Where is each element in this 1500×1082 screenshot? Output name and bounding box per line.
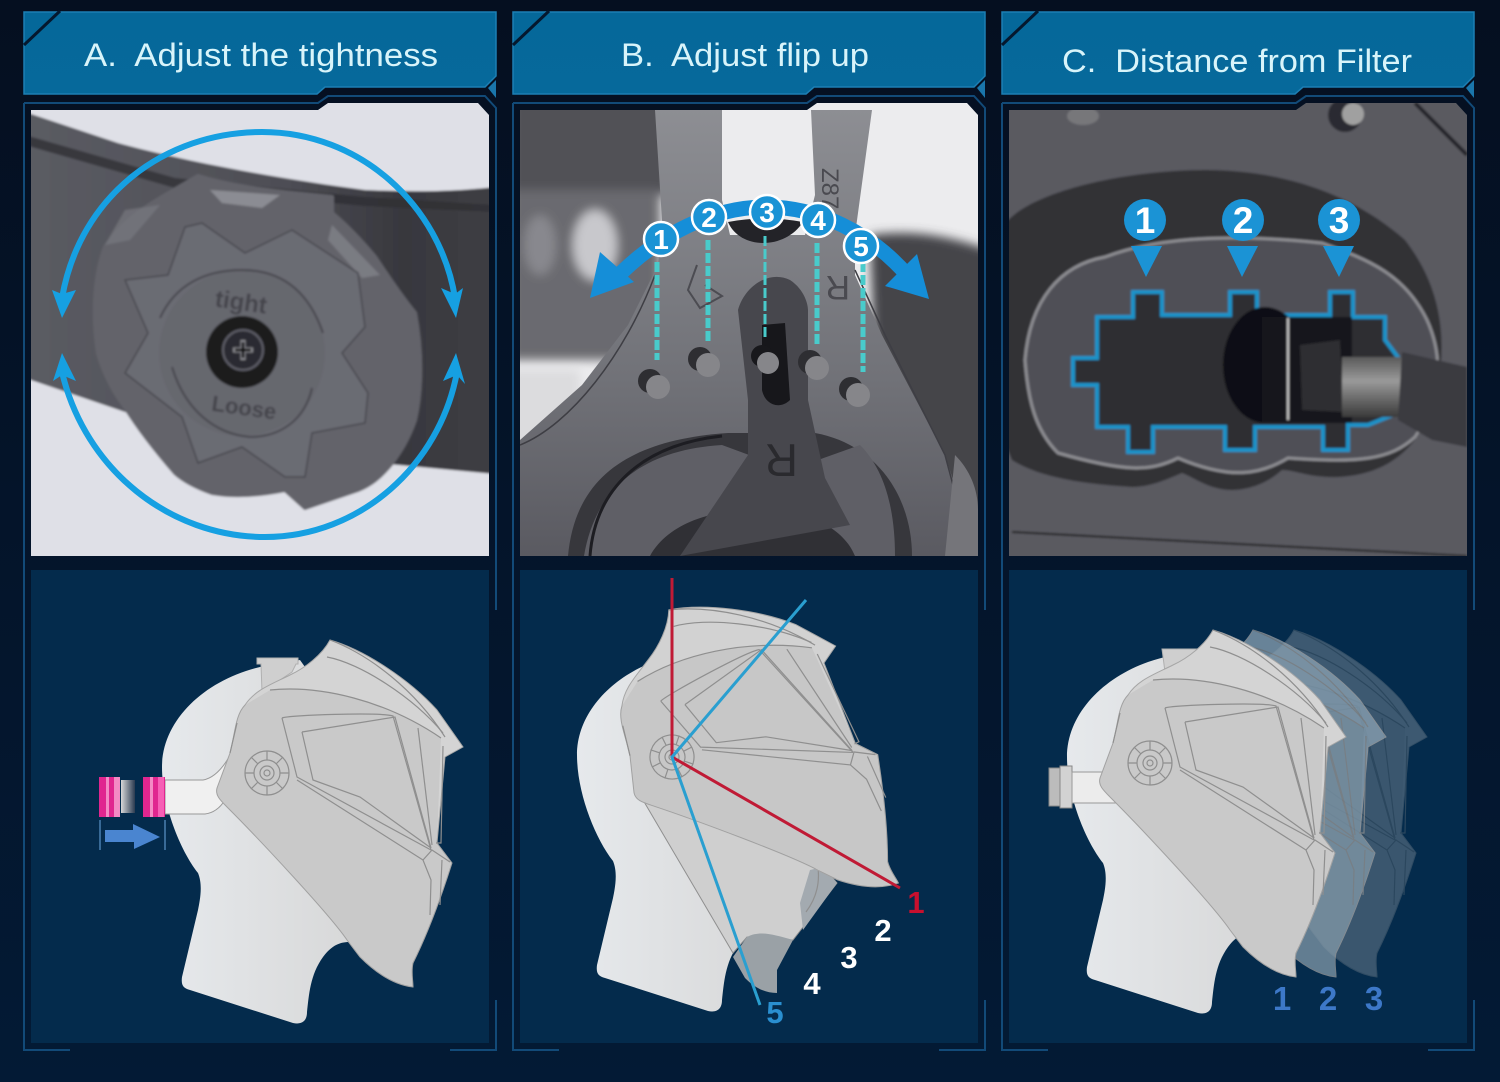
markings on plastic: Z87 bbox=[816, 168, 843, 209]
strap bbox=[165, 752, 232, 814]
position markers 1-5 bbox=[644, 195, 878, 263]
dashed guides bbox=[657, 236, 863, 372]
position numbers: 5 bbox=[766, 995, 784, 1030]
knob labels: Loose bbox=[210, 391, 278, 424]
arrows: rotation direction bbox=[52, 132, 465, 537]
position markers 1-3 bbox=[1124, 199, 1360, 277]
photo: flip up pivot: 2 bbox=[701, 202, 717, 233]
position numbers: 2 bbox=[874, 913, 892, 948]
header A bbox=[24, 11, 496, 98]
header B: B. Adjust flip up bbox=[621, 37, 869, 73]
diagram panel B bbox=[520, 550, 978, 1043]
markings on plastic: R bbox=[765, 434, 798, 486]
rim windows bbox=[210, 190, 280, 208]
header A: A. Adjust the tightness bbox=[84, 37, 438, 73]
markings on plastic bbox=[765, 168, 850, 486]
arrow: tighten direction bbox=[100, 820, 165, 850]
top bracket bbox=[257, 658, 298, 692]
gear relief bbox=[125, 223, 368, 477]
panel: B adjust flip up bbox=[510, 11, 990, 1050]
notch bbox=[728, 218, 803, 243]
distance numbers: 2 bbox=[1319, 980, 1337, 1017]
knob labels bbox=[212, 290, 276, 420]
photo: flip up pivot: 5 bbox=[853, 231, 869, 262]
photo: rail slots bbox=[1003, 98, 1473, 563]
knob sliding: pink bbox=[99, 777, 165, 817]
headband belt bbox=[25, 112, 495, 474]
header C bbox=[1002, 11, 1474, 98]
diagram panel A bbox=[31, 570, 489, 1043]
strap bbox=[1072, 768, 1130, 803]
position numbers: 3 bbox=[840, 940, 858, 975]
ghost helmet position 2 bbox=[1140, 630, 1386, 977]
header B bbox=[513, 11, 985, 98]
filter hardware bbox=[1223, 307, 1467, 447]
head bbox=[577, 648, 815, 1011]
slot outline bbox=[1073, 292, 1430, 452]
header C: C. Distance from Filter bbox=[1062, 43, 1412, 79]
photo: flip up pivot: 4 bbox=[810, 205, 826, 236]
panel frame C bbox=[1002, 96, 1474, 1050]
position numbers: 4 bbox=[803, 966, 821, 1001]
position numbers bbox=[766, 885, 925, 1030]
panel frame A bbox=[24, 96, 496, 1050]
knob labels: tight bbox=[213, 286, 269, 320]
scale ring bbox=[159, 270, 325, 436]
panel: C distance from filter bbox=[1002, 11, 1474, 1050]
center screw bbox=[206, 316, 278, 388]
photo: rail slots: 2 bbox=[1233, 200, 1253, 241]
helmet bbox=[217, 640, 463, 987]
recess bbox=[1004, 170, 1442, 490]
rear knob bbox=[1049, 766, 1072, 808]
distance numbers: 1 bbox=[1273, 980, 1291, 1017]
photo: rail slots: 3 bbox=[1329, 200, 1349, 241]
central strap bbox=[680, 277, 850, 556]
bottom seam bbox=[1012, 532, 1467, 556]
angle lines bbox=[672, 578, 900, 1005]
pivot bolts bbox=[638, 345, 870, 407]
knob disc bbox=[95, 176, 420, 508]
position numbers: 1 bbox=[907, 885, 925, 920]
helmet bbox=[1100, 630, 1346, 977]
markings on plastic: R bbox=[825, 268, 850, 306]
photo: flip up pivot: 1 bbox=[653, 224, 669, 255]
diagram panel C bbox=[1009, 570, 1467, 1043]
ghost helmet position 3 bbox=[1181, 630, 1427, 977]
pads bbox=[945, 455, 978, 556]
photo: flip up pivot: 3 bbox=[759, 197, 775, 228]
distance numbers: 3 bbox=[1365, 980, 1383, 1017]
yoke plastic bbox=[520, 110, 978, 556]
inner plate bbox=[1025, 238, 1438, 473]
head bbox=[162, 660, 400, 1023]
photo: flip up pivot bbox=[510, 95, 990, 561]
distance numbers bbox=[1273, 980, 1383, 1017]
photo: tightness knob bbox=[25, 98, 495, 563]
photo: rail slots: 1 bbox=[1135, 200, 1155, 241]
ear cup dark ring bbox=[568, 433, 912, 556]
flip range ghost positions bbox=[643, 800, 837, 993]
arc arrow bbox=[590, 207, 929, 299]
top bolts bbox=[1067, 98, 1467, 155]
head bbox=[1067, 650, 1305, 1013]
panel: A adjust the tightness bbox=[24, 11, 496, 1050]
helmet raised bbox=[567, 550, 943, 971]
panel frame B bbox=[513, 96, 985, 1050]
top bracket bbox=[1162, 649, 1198, 672]
